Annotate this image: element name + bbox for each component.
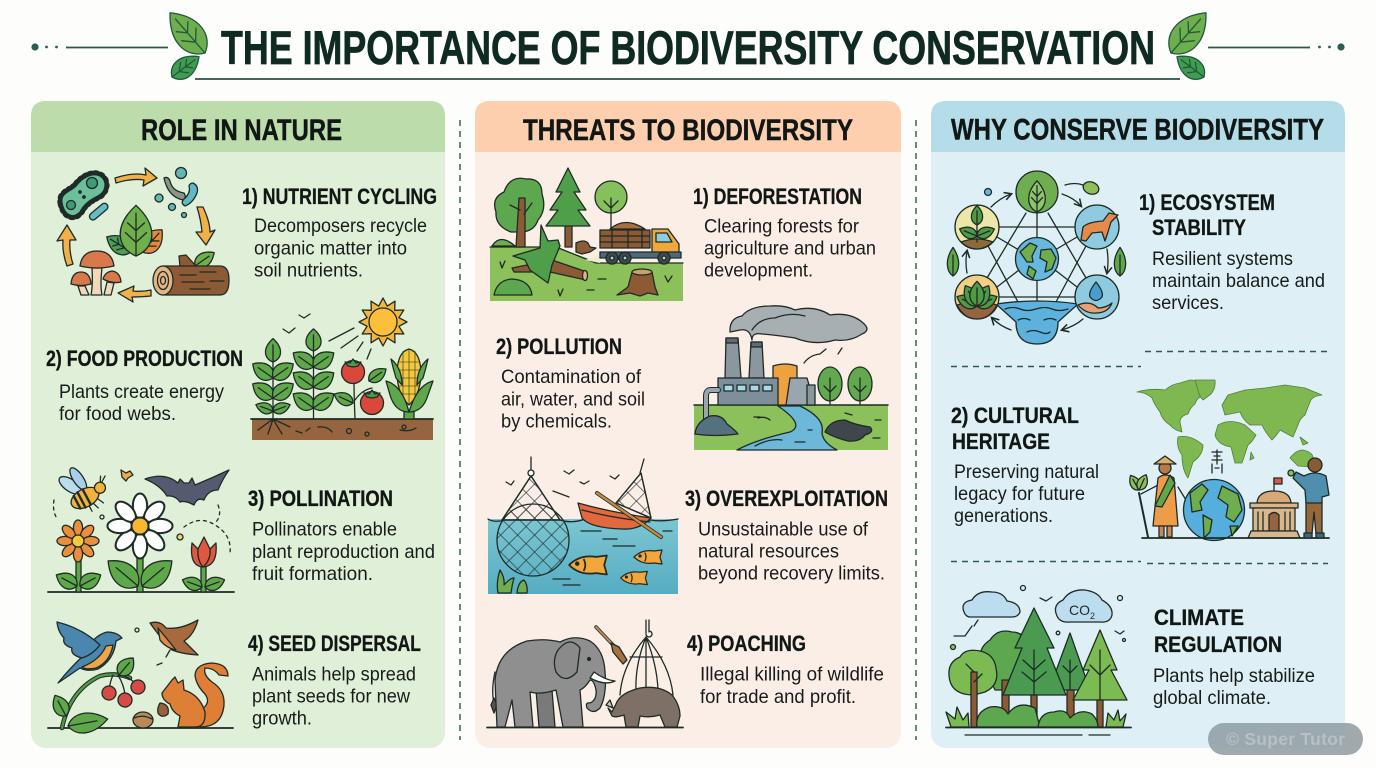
- description: overexploitation: natural resources: [698, 540, 839, 562]
- item: overexploitation: [488, 457, 888, 594]
- description: nutrient cycling: [254, 215, 427, 282]
- label: pollution: 2) POLLUTION: [496, 334, 622, 359]
- description: nutrient cycling: organic matter into: [254, 238, 407, 260]
- item: deforestation: [490, 168, 876, 301]
- item: poaching: [487, 620, 884, 728]
- icon: fishing nets: [488, 457, 678, 594]
- description: pollination: fruit formation.: [252, 563, 373, 585]
- description: climate regulation: [1153, 665, 1315, 709]
- description: pollination: [252, 518, 435, 585]
- description: overexploitation: beyond recovery limits.: [698, 562, 885, 584]
- label: cultural heritage: 2) CULTURAL: [951, 403, 1079, 428]
- label: CO2: [1069, 602, 1095, 621]
- heading: role in nature: ROLE IN NATURE: [141, 114, 342, 147]
- description: pollution: air, water, and soil: [501, 388, 645, 410]
- label: deforestation: 1) DEFORESTATION: [693, 184, 862, 209]
- panel: threats to biodiversity: [475, 101, 901, 748]
- header ornament right: [1160, 3, 1345, 85]
- label: CO2: CO: [1069, 602, 1090, 618]
- description: poaching: Illegal killing of wildlife: [700, 664, 884, 686]
- label: ecosystem stability: STABILITY: [1152, 215, 1246, 240]
- description: overexploitation: Unsustainable use of: [698, 518, 869, 540]
- description: poaching: for trade and profit.: [700, 686, 856, 708]
- description: ecosystem stability: services.: [1152, 292, 1224, 314]
- label: climate regulation: [1154, 605, 1282, 657]
- description: seed dispersal: [252, 664, 416, 730]
- icon: decomposition cycle: [57, 168, 229, 302]
- item: pollution: [496, 306, 888, 450]
- description: deforestation: Clearing forests for: [704, 216, 859, 238]
- label: cultural heritage: [951, 403, 1079, 454]
- icon: world map, people and globe: [1126, 380, 1329, 540]
- description: ecosystem stability: maintain balance and: [1152, 270, 1325, 292]
- label: cultural heritage: HERITAGE: [952, 429, 1050, 454]
- description: deforestation: [704, 216, 876, 282]
- icon: birds and squirrel: [48, 620, 233, 736]
- panel: role in nature: [31, 101, 445, 748]
- description: deforestation: development.: [704, 260, 813, 282]
- heading: threats to biodiversity: THREATS TO BIODIVERSITY: [523, 114, 853, 147]
- description: cultural heritage: generations.: [954, 505, 1053, 527]
- description: climate regulation: global climate.: [1153, 687, 1271, 709]
- description: overexploitation: [698, 518, 885, 584]
- description: cultural heritage: [954, 461, 1099, 527]
- title underline: [195, 78, 1180, 80]
- description: pollination: Pollinators enable: [252, 518, 397, 540]
- description: pollination: plant reproduction and: [252, 541, 435, 563]
- description: poaching: [700, 664, 884, 708]
- description: deforestation: agriculture and urban: [704, 238, 876, 260]
- description: ecosystem stability: [1152, 248, 1325, 314]
- item: climate regulation: [946, 586, 1315, 735]
- icon: crops and sun: [248, 298, 433, 440]
- description: food production: Plants create energy: [59, 381, 224, 403]
- description: food production: [59, 381, 224, 425]
- description: pollution: by chemicals.: [501, 410, 612, 432]
- icon: logging scene: [490, 168, 683, 301]
- description: seed dispersal: growth.: [252, 708, 312, 730]
- icon: pollinators and flowers: [48, 455, 234, 595]
- label: CO2: 2: [1090, 611, 1095, 621]
- description: seed dispersal: plant seeds for new: [252, 686, 411, 708]
- description: nutrient cycling: Decomposers recycle: [254, 215, 427, 237]
- item: seed dispersal: [48, 620, 421, 736]
- item: nutrient cycling: [57, 168, 437, 302]
- item: pollination: [48, 455, 435, 595]
- label: climate regulation: REGULATION: [1154, 632, 1282, 657]
- panel: why conserve biodiversity: [931, 101, 1345, 748]
- icon: factory and polluted river: [694, 306, 888, 450]
- description: seed dispersal: Animals help spread: [252, 664, 416, 686]
- description: cultural heritage: Preserving natural: [954, 461, 1099, 483]
- label: poaching: 4) POACHING: [687, 631, 806, 656]
- label: ecosystem stability: [1139, 190, 1275, 240]
- watermark: [1208, 723, 1363, 755]
- header ornament left: [31, 3, 216, 85]
- item: cultural heritage: [951, 380, 1329, 540]
- watermark: © Super Tutor: [1226, 729, 1345, 749]
- icon: forest and clouds: [946, 586, 1131, 735]
- icon: elephant, rhino, trap: [487, 620, 683, 728]
- label: overexploitation: 3) OVEREXPLOITATION: [685, 486, 888, 511]
- dashed column divider right: [915, 120, 917, 740]
- label: food production: 2) FOOD PRODUCTION: [46, 346, 243, 371]
- description: pollution: [501, 366, 645, 432]
- label: seed dispersal: 4) SEED DISPERSAL: [248, 631, 421, 656]
- label: climate regulation: CLIMATE: [1154, 605, 1244, 630]
- description: climate regulation: Plants help stabilize: [1153, 665, 1315, 687]
- description: cultural heritage: legacy for future: [954, 483, 1085, 505]
- icon: ecosystem network: [947, 171, 1126, 344]
- label: pollination: 3) POLLINATION: [248, 486, 393, 511]
- item: ecosystem stability: [947, 171, 1325, 344]
- description: food production: for food webs.: [59, 403, 176, 425]
- item: food production: [46, 298, 433, 440]
- description: nutrient cycling: soil nutrients.: [254, 260, 363, 282]
- description: pollution: Contamination of: [501, 366, 642, 388]
- label: ecosystem stability: 1) ECOSYSTEM: [1139, 190, 1275, 215]
- dashed column divider left: [459, 120, 461, 740]
- label: nutrient cycling: 1) NUTRIENT CYCLING: [242, 184, 437, 209]
- description: ecosystem stability: Resilient systems: [1152, 248, 1293, 270]
